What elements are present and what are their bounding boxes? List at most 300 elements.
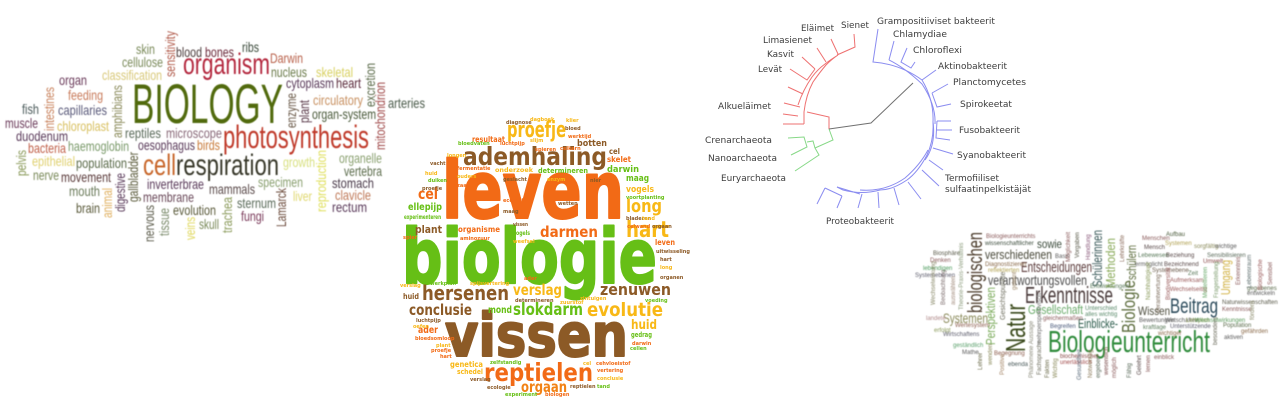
word: ademhaling: ademhaling [463, 142, 607, 171]
small vertical words: tissue [156, 208, 172, 236]
medium words: ellepijp [408, 202, 442, 213]
tiny horizontal words: Umwelt [1203, 259, 1223, 265]
tiny filler words: aminozuur [460, 236, 490, 242]
tiny filler words: hart [440, 354, 452, 360]
tiny filler words: experiment [505, 392, 538, 398]
medium words: Einblicke- [1078, 316, 1118, 331]
tiny filler words: werkplan [430, 281, 456, 287]
tiny filler words: hart [660, 257, 672, 263]
medium words: huid [631, 318, 657, 333]
tiny filler words: oefen [413, 324, 429, 330]
medium words: cel [609, 147, 620, 156]
tree labels: Aktinobakteerit [938, 62, 1007, 72]
tiny vertical words: Theorie-Praxis-Verhältnis [959, 243, 965, 310]
small horizontal words: muscle [5, 115, 38, 131]
medium words: vogels [513, 230, 530, 237]
tiny filler words: bladeren [626, 216, 651, 222]
word: respiration: respiration [176, 149, 279, 182]
tiny filler words: vacht [430, 161, 446, 167]
tiny filler words: celwand [627, 224, 651, 230]
medium words: maag [626, 174, 649, 184]
tiny filler words: bloedvaten [458, 141, 490, 147]
tiny vertical words: Möglichkeit [1066, 232, 1072, 262]
tiny filler words: darwin [632, 341, 652, 347]
tiny vertical words: gelernt [1012, 271, 1018, 290]
tiny filler words: ecologie [487, 385, 511, 391]
tree labels: Alkueläimet [718, 102, 771, 112]
small horizontal words: nerve [33, 167, 59, 183]
small horizontal words: liver [293, 188, 312, 204]
tree labels: Grampositiiviset bakteerit [877, 17, 995, 27]
tiny vertical words: Lebensraum [1247, 255, 1253, 288]
small horizontal words: cytoplasm [286, 75, 334, 91]
tree labels: Chlamydiae [893, 30, 947, 40]
tree labels: Kasvit [767, 50, 794, 60]
tiny horizontal words: reflektierten [988, 268, 1019, 274]
medium words: schülern [1124, 245, 1139, 280]
small horizontal words: capillaries [58, 102, 107, 118]
tiny filler words: verslag [400, 283, 421, 289]
tiny vertical words: auswählen [951, 276, 957, 305]
tiny filler words: voeding [645, 298, 668, 304]
tiny filler words: determineren [515, 298, 554, 304]
medium words: Systemen [943, 310, 988, 326]
tiny horizontal words: landete [926, 316, 946, 322]
tiny horizontal words: Wirtschaften [1165, 318, 1198, 324]
small horizontal words: nucleus [271, 64, 307, 80]
small vertical words: mitochondrion [372, 82, 388, 150]
tiny vertical words: Phänomene Aussage [1029, 320, 1035, 378]
tiny vertical words: Notwendig [1088, 350, 1094, 378]
medium words: mond [488, 305, 512, 316]
tiny filler words: cel [583, 361, 591, 367]
small horizontal words: growth [283, 154, 315, 170]
tree labels: Sienet [841, 21, 869, 31]
tiny filler words: duiken [428, 178, 447, 184]
big word: BIOLOGY: BIOLOGY [132, 72, 283, 135]
tiny filler words: klier [566, 118, 579, 124]
small horizontal words: organ [59, 72, 87, 88]
tiny vertical words: wesentlich [1104, 347, 1110, 376]
tiny horizontal words: Systemebenen [915, 273, 955, 279]
medium words: vissen [513, 222, 528, 228]
tiny filler words: bloedsomloop [415, 336, 455, 342]
tiny filler words: spijsvertering [470, 281, 510, 287]
small horizontal words: ribs [242, 39, 259, 55]
medium words: evolutie [587, 299, 663, 321]
tiny horizontal words: Kenntnisse [1222, 307, 1252, 313]
small horizontal words: stomach [332, 175, 374, 191]
small vertical words: intestines [41, 87, 57, 131]
medium words: long [626, 196, 662, 217]
medium words: zenuwen [600, 280, 671, 299]
small vertical words: veins [182, 217, 198, 240]
medium words: gedrag [631, 331, 652, 339]
small horizontal words: cellulose [122, 54, 163, 70]
tiny horizontal words: kraftlage [1143, 325, 1167, 331]
tiny filler words: geslacht [503, 177, 528, 183]
small vertical words: enzyme [283, 93, 299, 128]
small horizontal words: circulatory [313, 92, 363, 108]
tree: eukaryote branches [783, 34, 855, 129]
panel: Dutch biology circular word cloud [400, 117, 690, 398]
small horizontal words: chloroplast [57, 118, 109, 134]
tiny vertical words: Verantwortung [1156, 274, 1162, 313]
small horizontal words: reptiles [125, 125, 161, 141]
tiny horizontal words: lebendigen [923, 266, 952, 272]
tiny horizontal words: Denken [930, 258, 951, 264]
tiny filler words: weefsel [513, 239, 535, 245]
tiny filler words: spier [403, 235, 418, 241]
medium words: verschiedenen [985, 247, 1052, 262]
tiny horizontal words: Sensibilisieren [1207, 253, 1246, 259]
small vertical words: sensitivity [162, 31, 178, 77]
tiny horizontal words [915, 232, 1278, 368]
tiny filler words: tand [642, 216, 655, 222]
small horizontal words: bacteria [28, 140, 66, 156]
small horizontal words: bones [205, 44, 234, 60]
small horizontal words: heart [336, 75, 361, 91]
medium words: ader [418, 325, 438, 336]
medium words: orgaan [521, 378, 567, 396]
small horizontal words [5, 39, 425, 232]
tiny horizontal words: Biologieunterrichts [986, 234, 1035, 240]
medium words: Schülerinnen [1089, 230, 1105, 287]
tiny filler words [400, 117, 690, 398]
tiny horizontal words: gefährden [1241, 329, 1268, 335]
tree labels: Termofiiliset [944, 174, 999, 184]
small horizontal words: haemoglobin [68, 138, 129, 154]
tiny vertical words: Gelehrt [1137, 355, 1143, 375]
tiny filler words: diagnose [506, 120, 532, 126]
tiny vertical words: besonders [1213, 317, 1219, 345]
tree labels: sulfaatinpelkistäjät [945, 185, 1031, 195]
tiny filler words: zaad [457, 183, 471, 189]
medium words: slokdarm [513, 300, 583, 320]
small horizontal words: oesophagus [138, 137, 195, 153]
small horizontal words: sternum [237, 195, 276, 211]
small vertical words: excretion [362, 63, 378, 107]
big word: vissen: vissen [445, 301, 628, 371]
tiny vertical words: mehrperspektivisch [1037, 293, 1043, 345]
tree labels: Chloroflexi [913, 46, 962, 56]
small horizontal words: epithelial [32, 153, 75, 169]
small horizontal words: fungi [241, 208, 264, 224]
tiny horizontal words: gegebenes [1247, 286, 1277, 292]
tiny horizontal words: Lehrplan [1186, 318, 1209, 324]
medium words: schedel [457, 368, 483, 376]
small horizontal words: skeletal [316, 64, 353, 80]
tiny horizontal words: entwickeln [1247, 291, 1275, 297]
tiny horizontal words: Begreifen [1050, 324, 1076, 330]
medium words: Perspektiven [983, 287, 998, 345]
word: cell: cell [143, 149, 176, 182]
tiny filler words: nier [590, 178, 602, 184]
tiny horizontal words: Basis [1055, 254, 1070, 260]
tree labels: Fusobakteerit [959, 126, 1020, 136]
tiny vertical words: Modellieren [1203, 267, 1209, 298]
tiny vertical words: Biodiversität [1166, 267, 1172, 300]
tree labels: Limasienet [763, 36, 812, 46]
tiny horizontal words: Mensch [1144, 245, 1165, 251]
medium words: conclusie [409, 301, 472, 319]
tiny filler words: slijm [530, 138, 543, 144]
tiny filler words: celkern [560, 146, 581, 152]
medium words: resultaat [472, 135, 505, 144]
small horizontal words: clavicle [335, 187, 371, 203]
tiny filler words: reptielen [570, 384, 596, 390]
tiny vertical words: Nachhaltigkeit [1146, 262, 1152, 300]
tiny vertical words: lernen [1146, 355, 1152, 372]
word: organism: organism [183, 48, 270, 81]
tree: bacteria branches [817, 29, 953, 208]
tiny horizontal words: sorgfältig [1194, 244, 1218, 250]
tiny filler words: zuurstof [560, 300, 584, 306]
tiny filler words: bloed [565, 126, 581, 132]
tiny vertical words: Handlung [1086, 234, 1092, 260]
tiny filler words: enzym [547, 177, 565, 183]
tiny filler words: wetten [558, 201, 578, 207]
medium words: leven [655, 238, 675, 247]
tiny vertical words: fördern [1250, 301, 1256, 320]
small horizontal words: movement [61, 169, 111, 185]
tiny filler words: tand [597, 384, 610, 390]
medium words [403, 135, 675, 396]
tiny vertical words: Vorgaben [1075, 232, 1081, 258]
tiny horizontal words: einblick [1154, 355, 1175, 361]
tiny horizontal words: Lebewesen [1138, 253, 1169, 259]
big word: biologie: biologie [402, 212, 657, 301]
tiny horizontal words: Bewertungen [1139, 318, 1174, 324]
tiny filler words: ader [524, 276, 537, 282]
small horizontal words: microscope [166, 125, 222, 141]
medium words: organisme [458, 225, 501, 234]
tiny horizontal words: Beziehung [1166, 253, 1194, 259]
tiny horizontal words: Aufbau [1166, 232, 1185, 238]
tiny horizontal words: Biosphäre [933, 251, 961, 257]
tiny horizontal words: Wertesystem [955, 323, 990, 329]
small horizontal words: evolution [173, 202, 216, 218]
word: Erkenntnisse: Erkenntnisse [1025, 282, 1113, 308]
small vertical words [13, 31, 388, 242]
medium words: hersenen [422, 281, 509, 305]
tiny filler words: zelfstandig [490, 360, 522, 366]
tiny filler words: conclusie [597, 376, 624, 382]
tiny vertical words: Gesichtspunkte [1000, 272, 1007, 320]
small horizontal words: duodenum [16, 128, 68, 144]
tiny filler words: spieren [535, 147, 557, 153]
small horizontal words: mouth [69, 183, 100, 199]
medium words: verantwortungsvollen [988, 272, 1087, 288]
medium words: darwin [607, 165, 639, 175]
tiny filler words: longen [447, 153, 467, 159]
small horizontal words: organelle [339, 150, 382, 166]
tiny vertical words: Sensibel [1268, 262, 1274, 285]
tiny vertical words: Biologische [1258, 259, 1264, 290]
tree labels: Syanobakteerit [957, 151, 1026, 161]
tree labels: Euryarchaeota [721, 174, 786, 184]
tiny horizontal words: geständlich [953, 343, 983, 349]
small vertical words: pelvis [13, 150, 29, 176]
small vertical words: gallbladder [125, 152, 141, 202]
medium words: huid [403, 292, 419, 301]
small horizontal words: vertebra [344, 163, 382, 179]
medium words: hart [626, 218, 669, 243]
small horizontal words: skin [136, 41, 155, 57]
small vertical words: Lamarck [273, 187, 289, 227]
tiny horizontal words: aktiven [1224, 335, 1243, 341]
tiny vertical words: Gesundheit [1077, 349, 1083, 380]
panel: English biology word cloud [5, 31, 425, 242]
tiny horizontal words: Entwicklungen [1090, 284, 1129, 290]
small horizontal words: membrane [143, 189, 194, 205]
tiny horizontal words: unerlässlich [1060, 360, 1092, 366]
word: proefje: proefje [507, 118, 566, 143]
word: biologischen: biologischen [965, 232, 987, 313]
small horizontal words: brain [76, 200, 100, 216]
tiny filler words: biologen [545, 392, 570, 398]
tiny vertical words: wenden [988, 344, 994, 366]
tiny filler words: organen [660, 275, 684, 281]
medium words: sowie [1037, 237, 1062, 251]
tree: archaea branches [788, 129, 833, 171]
tree labels: Crenarchaeota [705, 136, 772, 146]
tree: root stem [829, 83, 913, 129]
tiny filler words: maag [503, 209, 519, 215]
tiny filler words: dagboek [530, 117, 555, 123]
medium words: Umgang [1218, 260, 1233, 295]
small horizontal words: blood [176, 44, 202, 60]
tiny vertical words: Lehrkräfte [1120, 234, 1126, 262]
tiny vertical words: Wechselwirkung [931, 261, 937, 305]
tiny horizontal words: ermöglicht [1135, 262, 1163, 268]
small vertical words: plant [296, 100, 312, 123]
tiny filler words: verslag [470, 377, 491, 383]
tree labels: Proteobakteerit [826, 217, 894, 227]
tiny filler words: proefje [431, 348, 452, 354]
tiny horizontal words: Unterschied [1085, 306, 1117, 312]
tiny vertical words: Fachsprache [1037, 340, 1043, 375]
tiny horizontal words: Mathe [962, 350, 979, 356]
small horizontal words: organ-system [312, 106, 376, 122]
tiny vertical words: Fragestellung [1214, 262, 1220, 298]
tiny filler words: cellen [630, 346, 647, 352]
tiny horizontal words: Population [1223, 323, 1251, 329]
tiny filler words: ouders [457, 174, 476, 180]
tiny vertical words: Erkenntnis [1236, 257, 1242, 285]
tiny horizontal words: Zeit [1188, 271, 1198, 277]
panel: German biology word cloud [915, 230, 1278, 380]
small horizontal words: feeding [68, 87, 103, 103]
word: Natur: Natur [1000, 304, 1031, 352]
tiny vertical words: möglich [1112, 357, 1118, 378]
tiny vertical words [931, 232, 1274, 380]
tiny horizontal words: Systemebene [1152, 268, 1189, 274]
tree labels: Nanoarchaeota [708, 154, 777, 164]
small horizontal words: fish [22, 101, 39, 117]
tiny horizontal words: wichtiger [1157, 331, 1182, 337]
tiny horizontal words: Systemen [1165, 241, 1192, 247]
small horizontal words: population [76, 155, 127, 171]
small vertical words: nervous [141, 205, 157, 242]
tree labels: Planctomycetes [953, 78, 1026, 88]
tiny filler words: zintuigen [580, 296, 607, 302]
small horizontal words: arteries [388, 95, 425, 111]
word: photosynthesis: photosynthesis [223, 119, 369, 155]
small vertical words: amphibians [109, 85, 125, 138]
medium words: genetica [450, 360, 483, 369]
tiny filler words: uitwisseling [656, 249, 690, 255]
tiny filler words: cehvloeistof [596, 361, 631, 367]
tiny vertical words: Positive [1000, 353, 1006, 375]
panel: phylogenetic tree of life [705, 17, 1031, 227]
tiny filler words: long [660, 265, 673, 271]
small horizontal words: specimen [258, 174, 303, 190]
tiny horizontal words: Bezeichnend [1164, 262, 1199, 268]
tiny filler words: luchtpijp [416, 318, 441, 324]
medium words: skelet [607, 155, 631, 164]
medium words: vogels [626, 185, 654, 195]
medium words: verslag [513, 281, 562, 299]
medium words: Gesellschaft [1028, 302, 1083, 317]
small horizontal words: birds [197, 137, 220, 153]
medium words: darmen [540, 223, 598, 241]
medium words: Wissen [1138, 304, 1170, 318]
medium words: onderzoek [495, 167, 534, 174]
tiny filler words: proefje [422, 186, 443, 192]
tiny horizontal words: biochemischer [1060, 354, 1099, 360]
medium words: experimenteren [404, 214, 441, 221]
tiny horizontal words: erfolgt [934, 328, 951, 334]
small vertical words: reproduction [313, 150, 329, 212]
tiny horizontal words: alles wichtig [1085, 312, 1117, 318]
small horizontal words: inverterbrae [147, 176, 204, 192]
tiny filler words: ecologie [503, 198, 527, 204]
tiny filler words: plant [436, 343, 451, 349]
small vertical words: digestive [112, 173, 128, 212]
medium words: Methoden [1103, 238, 1118, 288]
tree labels: Eläimet [801, 24, 834, 34]
tiny horizontal words: Unterstützende [1170, 324, 1211, 330]
tiny horizontal words: wissenschaftlicher [984, 241, 1034, 247]
medium words: cel [418, 185, 438, 203]
medium words: Biologie [1119, 280, 1139, 333]
medium words: botten [577, 139, 607, 149]
tiny horizontal words: gleichermaßen [1043, 316, 1083, 322]
tiny horizontal words: Wechselwirkungen [1195, 318, 1245, 324]
tiny vertical words: Fakten [1045, 360, 1051, 378]
tiny vertical words: Lehrer [978, 353, 984, 370]
medium words: determineren [538, 167, 588, 175]
tiny horizontal words: Wirtschaftens [943, 332, 979, 338]
tree labels: Spirokeetat [960, 100, 1012, 110]
small horizontal words: mammals [209, 181, 255, 197]
small horizontal words: Darwin [270, 50, 303, 66]
tiny horizontal words: Wechselseitig [1170, 287, 1207, 293]
tiny filler words: vertering [597, 368, 624, 374]
small horizontal words: skull [199, 216, 219, 232]
word: Beitrag: Beitrag [1170, 295, 1218, 318]
big word: leven: leven [442, 145, 624, 237]
small vertical words: animal [99, 188, 115, 218]
tiny filler words: orgaan [652, 224, 672, 230]
tiny horizontal words: wichtige [1214, 244, 1237, 250]
tree labels [705, 17, 1031, 227]
medium words [943, 230, 1233, 345]
tiny vertical words: Wichtig [1053, 358, 1059, 378]
tiny vertical words: ergeben [1096, 356, 1102, 378]
tiny filler words: huid [425, 171, 438, 177]
